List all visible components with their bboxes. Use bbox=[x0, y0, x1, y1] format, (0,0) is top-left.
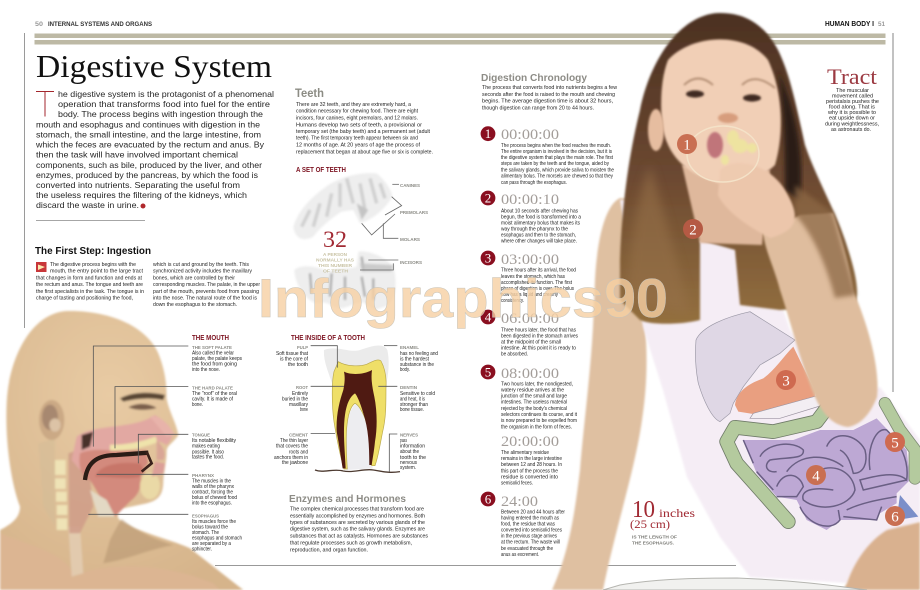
enzymes text: substances that act as catalysts. Hormones are substances bbox=[290, 534, 428, 540]
tooth labels: right: body. bbox=[400, 367, 410, 373]
enzymes text: essentially accomplished by enzymes and hormones. Both bbox=[290, 513, 425, 519]
tooth labels: right: information bbox=[400, 444, 425, 450]
chronology heading: Digestion Chronology bbox=[481, 72, 587, 84]
teeth text: 12 months of age. At 20 years of age the process of bbox=[296, 143, 420, 149]
mouth labels: ESOPHAGUS bbox=[192, 513, 220, 519]
mouth labels: esophagus and stomach bbox=[192, 535, 242, 541]
tract callout: eat upside down or bbox=[829, 116, 875, 122]
hair over arm bbox=[795, 185, 856, 298]
tooth labels: left: Soft tissue that bbox=[276, 351, 309, 357]
digestive step markers on girl: 2 bbox=[689, 222, 697, 238]
step 1: alimentary bolus. The morsels are chewed so that they bbox=[501, 173, 613, 179]
step 5 bbox=[481, 364, 578, 430]
intro text block: mouth and esophagus and continues with digestion in the bbox=[36, 120, 260, 130]
header bars bbox=[34, 34, 886, 44]
tooth labels: right: bone tissue. bbox=[400, 407, 424, 413]
right forearm bbox=[763, 213, 878, 427]
tooth labels: left: is the core of bbox=[280, 356, 309, 362]
ingestion text: mouth, the entry point to the large tract bbox=[50, 268, 143, 274]
enzymes text bbox=[290, 507, 428, 553]
step 3: consistency. bbox=[501, 298, 524, 304]
callout: 32 teeth: NORMALLY HAS bbox=[316, 258, 355, 264]
hair bbox=[620, 13, 857, 324]
intro text block: which the feces are evacuated by the rectum and anus. By bbox=[35, 140, 265, 150]
mouth labels: The "roof" of the oral bbox=[192, 391, 237, 397]
step 1: the digestive system that plays the main role. The first bbox=[501, 155, 614, 161]
step 5: selectors continues its course, and it bbox=[501, 412, 578, 418]
esophagus length callout: THE ESOPHAGUS. bbox=[632, 540, 674, 546]
step 4: intestine. At this point it is ready to bbox=[501, 346, 576, 352]
tooth labels: left: the tooth bbox=[288, 362, 308, 368]
mouth labels bbox=[192, 345, 242, 553]
step 3: 03:00:00 bbox=[501, 252, 559, 268]
plate bbox=[603, 578, 867, 590]
step 2: 00:00:10 bbox=[501, 192, 559, 208]
tooth labels: right bbox=[400, 345, 438, 471]
mouth section heading: THE MOUTH bbox=[192, 333, 229, 342]
step 20 hours: this part of the process the bbox=[501, 468, 558, 474]
food bbox=[721, 130, 757, 165]
step 2 bbox=[481, 190, 581, 245]
esophagus length callout: IS THE LENGTH OF bbox=[632, 534, 677, 540]
step 5: watery residue arrives at the bbox=[501, 388, 564, 394]
callout: 32 teeth: THIS NUMBER bbox=[318, 263, 353, 269]
illustration: head cross-section bbox=[0, 311, 243, 590]
leader lines bbox=[88, 346, 188, 514]
tooth labels: left: PULP bbox=[297, 345, 309, 351]
callout: 32 teeth: 32 bbox=[323, 227, 347, 252]
stomach bbox=[735, 347, 815, 414]
step 3: phase of digestion is over. The bolus bbox=[501, 286, 574, 292]
set of teeth heading: A SET OF TEETH bbox=[296, 165, 346, 174]
chronology intro: begins. The average digestion time is about 32 hours, bbox=[482, 99, 613, 105]
intro text block: then the task will have involved important chemical bbox=[36, 150, 238, 160]
digestive step markers on girl bbox=[677, 134, 905, 526]
step 20 hours: remains in the large intestine bbox=[501, 456, 562, 462]
ingestion text: charge of tasting and positioning the food, bbox=[36, 296, 133, 302]
intro text block: the useless requires the filtering of the kidneys, which bbox=[36, 190, 247, 200]
step 5: 5 bbox=[485, 364, 491, 380]
mouth labels: PHARYNX bbox=[192, 473, 215, 479]
mouth bbox=[707, 132, 723, 158]
step 5: Two hours later, the nondigested, bbox=[501, 381, 573, 387]
left arm bbox=[552, 198, 647, 590]
mouth labels: TONGUE bbox=[192, 432, 211, 438]
step 5: the organism in the form of feces. bbox=[501, 424, 572, 430]
teeth text: temporary set (the baby teeth) and a permanent set (adult bbox=[296, 129, 430, 135]
tooth labels: left bbox=[274, 345, 309, 466]
esophagus length callout: inches bbox=[659, 506, 695, 520]
enamel bbox=[324, 345, 389, 385]
tooth labels: left: bone bbox=[300, 407, 308, 413]
mouth labels: bolus toward the bbox=[192, 525, 228, 531]
step 3 bbox=[481, 250, 576, 304]
mouth labels: cavity. It is made of bbox=[192, 397, 234, 403]
step 2: where other changes will take place. bbox=[501, 239, 577, 245]
tooth labels: right: has no feeling and bbox=[400, 351, 438, 357]
tract callout: movement called bbox=[832, 93, 873, 99]
step 3: 3 bbox=[485, 250, 491, 266]
enzymes text: that regulate processes such as growth metabolism, bbox=[290, 540, 412, 546]
spine bbox=[55, 460, 67, 530]
enzymes heading: Enzymes and Hormones bbox=[289, 493, 406, 505]
bottom rule bbox=[215, 564, 736, 566]
digestive step markers on girl: 5 bbox=[891, 436, 899, 452]
digestive step markers on girl: 1 bbox=[683, 138, 691, 154]
tooth labels: right: substance in the bbox=[400, 362, 434, 368]
mouth labels: sphincter. bbox=[192, 547, 212, 553]
lower teeth bbox=[294, 251, 396, 310]
tongue and jaw bbox=[79, 450, 148, 517]
step 5: is now prepared to be expelled from bbox=[501, 418, 577, 424]
teeth type labels bbox=[400, 183, 429, 266]
chronology intro: though digestion can range from 20 to 44 hours. bbox=[482, 105, 594, 111]
step 6: anus as excrement. bbox=[501, 552, 539, 558]
step 4: been digested in the stomach arrives bbox=[501, 333, 578, 339]
step 4: 4 bbox=[485, 310, 492, 324]
mouth labels: stomach. The bbox=[192, 530, 219, 536]
large intestine bbox=[727, 403, 915, 522]
tooth labels: right: nervous bbox=[400, 460, 417, 466]
intro text block: operation that transforms food into fuel for the entire bbox=[58, 99, 270, 109]
callout: 32 teeth: A PERSON bbox=[323, 252, 348, 258]
ingestion text: that changes in form and function and ends at bbox=[36, 276, 142, 282]
bracket lines bbox=[360, 184, 402, 270]
step 20 hours: The alimentary residue bbox=[501, 450, 549, 456]
step 20 hours: residue is converted into bbox=[501, 474, 558, 480]
teeth text bbox=[296, 102, 433, 156]
mouth labels: The muscles in the bbox=[192, 479, 231, 485]
header: left folio: 50 bbox=[35, 21, 43, 28]
step 6: be evacuated through the bbox=[501, 546, 553, 552]
end mark bbox=[140, 204, 146, 208]
step 1 bbox=[481, 126, 614, 186]
chronology intro: The process that converts food into nutrients begins a few bbox=[482, 85, 618, 91]
ingestion text: synchronized activity includes the maxillary bbox=[153, 268, 252, 274]
step 6: in the previous stage arrives bbox=[501, 534, 557, 540]
step 4: at the midpoint of the small bbox=[501, 339, 561, 345]
mouth labels: tastes the food. bbox=[192, 455, 224, 461]
step 2: About 10 seconds after chewing has bbox=[501, 208, 578, 214]
left margin rule bbox=[24, 33, 26, 328]
tooth labels: left: the jawbone bbox=[282, 460, 308, 466]
small intestine bbox=[743, 418, 910, 530]
mouth labels: into the esophagus. bbox=[192, 501, 232, 507]
mouth labels: palate, the palate keeps bbox=[192, 356, 242, 362]
header: right folio: 51 bbox=[878, 21, 885, 28]
step 2: way through the pharynx to the bbox=[501, 226, 568, 232]
tract callout: why it is possible to bbox=[828, 110, 876, 116]
tooth labels: right: stronger than bbox=[400, 402, 428, 408]
tract callout: during weightlessness, bbox=[825, 121, 879, 127]
teeth type labels: PREMOLARS bbox=[400, 210, 429, 216]
step 6: 6 bbox=[485, 492, 492, 506]
hair highlights bbox=[628, 165, 690, 315]
esophagus length callout bbox=[630, 497, 695, 546]
tooth labels: right: Sensitive to cold bbox=[400, 391, 435, 397]
digestive step markers on girl: 3 bbox=[782, 374, 790, 390]
teeth type labels: MOLARS bbox=[400, 237, 421, 243]
step 3: Three hours after its arrival, the food bbox=[501, 268, 576, 274]
drop cap bbox=[36, 92, 54, 116]
face bbox=[661, 39, 781, 183]
step 5: 08:00:00 bbox=[501, 366, 559, 382]
right margin rule bbox=[892, 33, 894, 392]
organs bbox=[695, 312, 918, 530]
ingestion text: into the nose. The natural route of the food is bbox=[153, 296, 257, 302]
step 4: be absorbed. bbox=[501, 352, 528, 358]
title: Digestive System bbox=[36, 48, 272, 84]
tooth labels: left: The thin layer bbox=[280, 438, 308, 444]
esophagus length callout: 10 bbox=[632, 497, 655, 523]
intro text block: enzymes, produced by the pancreas, by which the food is bbox=[36, 170, 258, 180]
step 6: converted into semisolid feces bbox=[501, 528, 562, 534]
teeth type labels: INCISORS bbox=[400, 260, 423, 266]
step 4 bbox=[481, 310, 578, 358]
step 2: begun, the food is transformed into a bbox=[501, 214, 581, 220]
mouth labels: THE HARD PALATE bbox=[192, 385, 234, 391]
tooth labels: left: maxillary bbox=[289, 402, 308, 408]
tract callout: Tract bbox=[827, 64, 877, 89]
teeth text: There are 32 teeth, and they are extremely hard, a bbox=[296, 102, 412, 108]
step 5: intestines. The useless material bbox=[501, 400, 567, 406]
eye and brow bbox=[120, 393, 165, 402]
step 3: now has a liquid and creamy bbox=[501, 292, 558, 298]
mouth labels: makes eating bbox=[192, 444, 220, 450]
mouth labels: bone. bbox=[192, 402, 203, 408]
neck bbox=[682, 165, 770, 245]
ingestion text bbox=[36, 262, 260, 308]
enzymes text: digestive system, such as the salivary glands. Enzymes are bbox=[290, 527, 425, 533]
enzymes text: The complex chemical processes that transform food are bbox=[290, 507, 424, 513]
rectum bbox=[897, 495, 918, 520]
ingestion icon bbox=[36, 262, 46, 272]
intro text block: he digestive system is the protagonist of a phenomenal bbox=[58, 89, 274, 99]
hand bbox=[718, 163, 795, 238]
tooth labels: right: tooth to the bbox=[400, 455, 426, 461]
oral cavity bbox=[85, 453, 148, 480]
step 6: food, the residue that was bbox=[501, 521, 555, 527]
tooth labels: right: about the bbox=[400, 449, 419, 455]
ear bbox=[648, 109, 664, 151]
step 5: junction of the small and large bbox=[500, 394, 567, 400]
teeth text: condition necessary for chewing food. There are eight bbox=[296, 109, 418, 115]
leader lines bbox=[311, 346, 397, 472]
intro text block bbox=[35, 89, 274, 210]
teeth type labels: CANINES bbox=[400, 183, 421, 189]
step 2: moist alimentary bolus that makes its bbox=[501, 220, 580, 226]
teeth text: replacement that began at about age five or six is complete. bbox=[296, 150, 433, 156]
root cavity bbox=[347, 403, 373, 470]
pharynx bbox=[68, 447, 93, 533]
tooth labels: right: is the hardest bbox=[400, 356, 430, 362]
mouth labels: the food from going bbox=[192, 362, 237, 368]
step 5: rejected by the body's chemical bbox=[501, 406, 567, 412]
ingestion text: part of the mouth, prevents food from passing bbox=[153, 289, 259, 295]
tooth labels: right: NERVES bbox=[400, 432, 419, 438]
mouth labels: possible. It also bbox=[192, 449, 224, 455]
ear bbox=[39, 400, 64, 440]
step 1: steps are taken by the teeth and the tongue, aided by bbox=[501, 161, 609, 167]
illustration: set of teeth bbox=[293, 173, 402, 310]
tooth labels: left: CEMENT bbox=[289, 432, 308, 438]
heading: the first step: The First Step: Ingestion bbox=[35, 245, 151, 257]
teeth text: teeth). The first temporary teeth appear between six and bbox=[296, 136, 418, 142]
step 1: 00:00:00 bbox=[501, 127, 559, 143]
step 20 hours bbox=[501, 434, 562, 487]
mouth labels: Its notable flexibility bbox=[192, 438, 237, 444]
step 6: at the rectum. The waste will bbox=[501, 540, 560, 546]
callout: 32 teeth bbox=[316, 227, 355, 275]
step 1: the salivary glands, which provide saliva to moisten the bbox=[501, 167, 614, 173]
sinus area bbox=[72, 415, 172, 470]
step 6 bbox=[481, 492, 565, 558]
mouth labels: walls of the pharynx bbox=[192, 484, 234, 490]
upper teeth bbox=[293, 173, 392, 239]
ingestion text: corresponding muscles. The palate, in the upper bbox=[153, 282, 260, 288]
mouth labels: Also called the velar bbox=[192, 351, 234, 357]
tooth labels: right: and heat, it is bbox=[400, 397, 425, 403]
teeth heading: Teeth bbox=[295, 86, 324, 100]
ingestion text: which is cut and ground by the teeth. This bbox=[152, 262, 249, 268]
leg bbox=[843, 522, 920, 590]
esophagus length callout: (25 cm) bbox=[630, 517, 670, 531]
step 20 hours: between 12 and 28 hours. In bbox=[501, 462, 562, 468]
mouth labels: contract, forcing the bbox=[192, 490, 233, 496]
header: right folio: HUMAN BODY I bbox=[825, 21, 874, 28]
step 4: 06:00:00 bbox=[501, 311, 559, 327]
mouth labels: bolus of chewed food bbox=[192, 495, 237, 501]
digestive step markers on girl: 6 bbox=[891, 510, 899, 526]
step 6: 24:00 bbox=[501, 494, 538, 510]
tooth labels: left: that covers the bbox=[276, 444, 308, 450]
enzymes text: reproduction, and organ function. bbox=[290, 547, 368, 553]
tract callout: food along. That is bbox=[829, 105, 876, 111]
tooth labels: left: roots and bbox=[289, 449, 308, 455]
digestive step markers on girl: 4 bbox=[812, 468, 820, 484]
tract callout: The muscular bbox=[836, 88, 869, 94]
ingestion text: down the esophagus to the stomach. bbox=[153, 302, 237, 308]
tract callout bbox=[825, 64, 879, 133]
intro text block: converted into nutrients. Separating the useful from bbox=[36, 180, 240, 190]
nerves bbox=[315, 470, 400, 472]
step 20 hours: 20:00:00 bbox=[501, 434, 559, 450]
tooth labels: left: Entirely bbox=[292, 391, 308, 397]
step 1: The process begins when the food reaches the mouth. bbox=[501, 143, 611, 149]
callout: 32 teeth: OF TEETH bbox=[323, 269, 349, 275]
tooth labels: left: ROOT bbox=[296, 385, 308, 391]
enzymes text: types of substances are secreted by various glands of the bbox=[290, 520, 425, 526]
step 2: 2 bbox=[485, 190, 491, 206]
liver bbox=[695, 312, 795, 422]
tooth labels: right: system. bbox=[400, 465, 416, 471]
hair shadow bbox=[778, 70, 801, 200]
tract callout: peristalsis pushes the bbox=[826, 99, 879, 105]
tooth labels: right: DENTIN bbox=[400, 385, 418, 391]
magnified mouth lens bbox=[687, 126, 759, 182]
tooth labels: right: ENAMEL bbox=[400, 345, 419, 351]
step 6: having entered the mouth as bbox=[501, 515, 559, 521]
ingestion text: the first specialists in the task. The tongue is in bbox=[36, 289, 144, 295]
ingestion text: bones, which are controlled by their bbox=[153, 276, 235, 282]
dentin bbox=[332, 360, 386, 469]
mouth labels: into the nose. bbox=[192, 367, 220, 373]
mouth labels: THE SOFT PALATE bbox=[192, 345, 233, 351]
step 3: leaves the stomach, which has bbox=[501, 274, 565, 280]
illustration: girl photo bbox=[552, 13, 920, 590]
step 1: can pass through the esophagus. bbox=[501, 180, 567, 186]
watermark: Infographics90 bbox=[258, 267, 668, 329]
tooth labels: right: pass bbox=[400, 438, 407, 444]
step 4: Three hours later, the food that has bbox=[501, 327, 576, 333]
chronology intro: seconds after the food is raised to the mouth and chewing bbox=[482, 92, 615, 98]
step 3: accomplished its function. The first bbox=[501, 280, 573, 286]
tooth labels: left: buried in the bbox=[282, 397, 308, 403]
pulp bbox=[337, 370, 377, 468]
teeth text: Humans develop two sets of teeth, a provisional or bbox=[296, 122, 422, 128]
intro text block: body. The process begins with ingestion through the bbox=[58, 109, 263, 119]
mouth labels: Its muscles force the bbox=[192, 519, 236, 525]
mouth labels: are separated by a bbox=[192, 541, 231, 547]
step 1: The entire organism is involved in the decision, but it is bbox=[501, 149, 612, 155]
step 2: esophagus and then to the stomach, bbox=[501, 233, 576, 239]
intro text block: discard the waste in urine. bbox=[36, 200, 139, 210]
tooth labels: left: anchors them in bbox=[274, 455, 308, 461]
chronology intro bbox=[482, 85, 618, 111]
step 20 hours: semisolid feces. bbox=[501, 481, 533, 487]
teeth text: incisors, four canines, eight premolars, and 12 molars. bbox=[296, 116, 418, 122]
intro text block: stomach, the small intestine, and the large intestine, from bbox=[36, 130, 261, 140]
step 1: 1 bbox=[485, 126, 491, 141]
header: left folio: INTERNAL SYSTEMS AND ORGANS bbox=[48, 21, 153, 28]
eyes and brows bbox=[684, 78, 775, 123]
step 6: Between 20 and 44 hours after bbox=[501, 509, 565, 515]
tract callout: as astronauts do. bbox=[831, 127, 871, 133]
ingestion text: The digestive process begins with the bbox=[50, 262, 136, 268]
illustration: tooth cross-section bbox=[311, 345, 400, 472]
intro text block: components, such as bile, produced by the liver, and other bbox=[36, 160, 262, 170]
tooth section heading: THE INSIDE OF A TOOTH bbox=[291, 333, 365, 342]
ingestion text: the rectum and anus. The tongue and teeth are bbox=[36, 282, 143, 288]
dress bbox=[620, 200, 920, 583]
